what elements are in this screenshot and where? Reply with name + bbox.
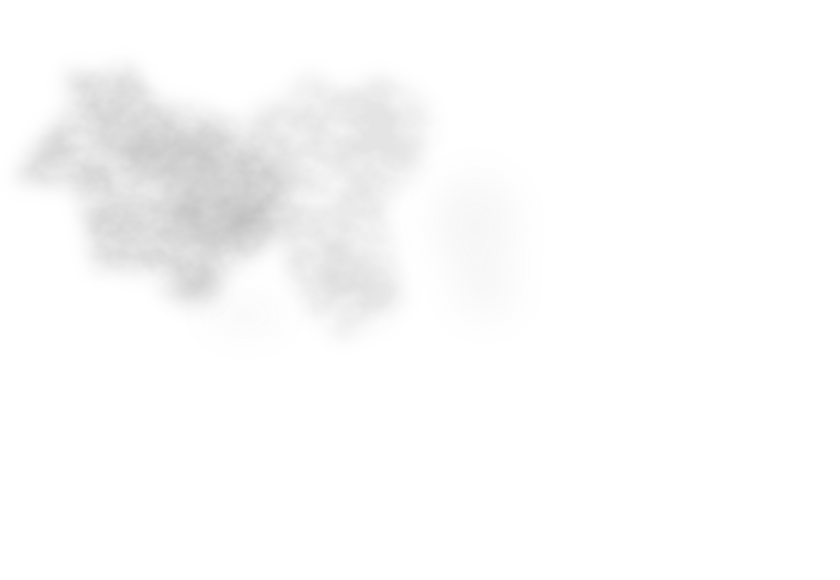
faint right wisp (205, 175, 517, 330)
cloud left lobe (20, 68, 285, 305)
dense core (111, 130, 355, 301)
cloud right lobe (240, 72, 425, 335)
